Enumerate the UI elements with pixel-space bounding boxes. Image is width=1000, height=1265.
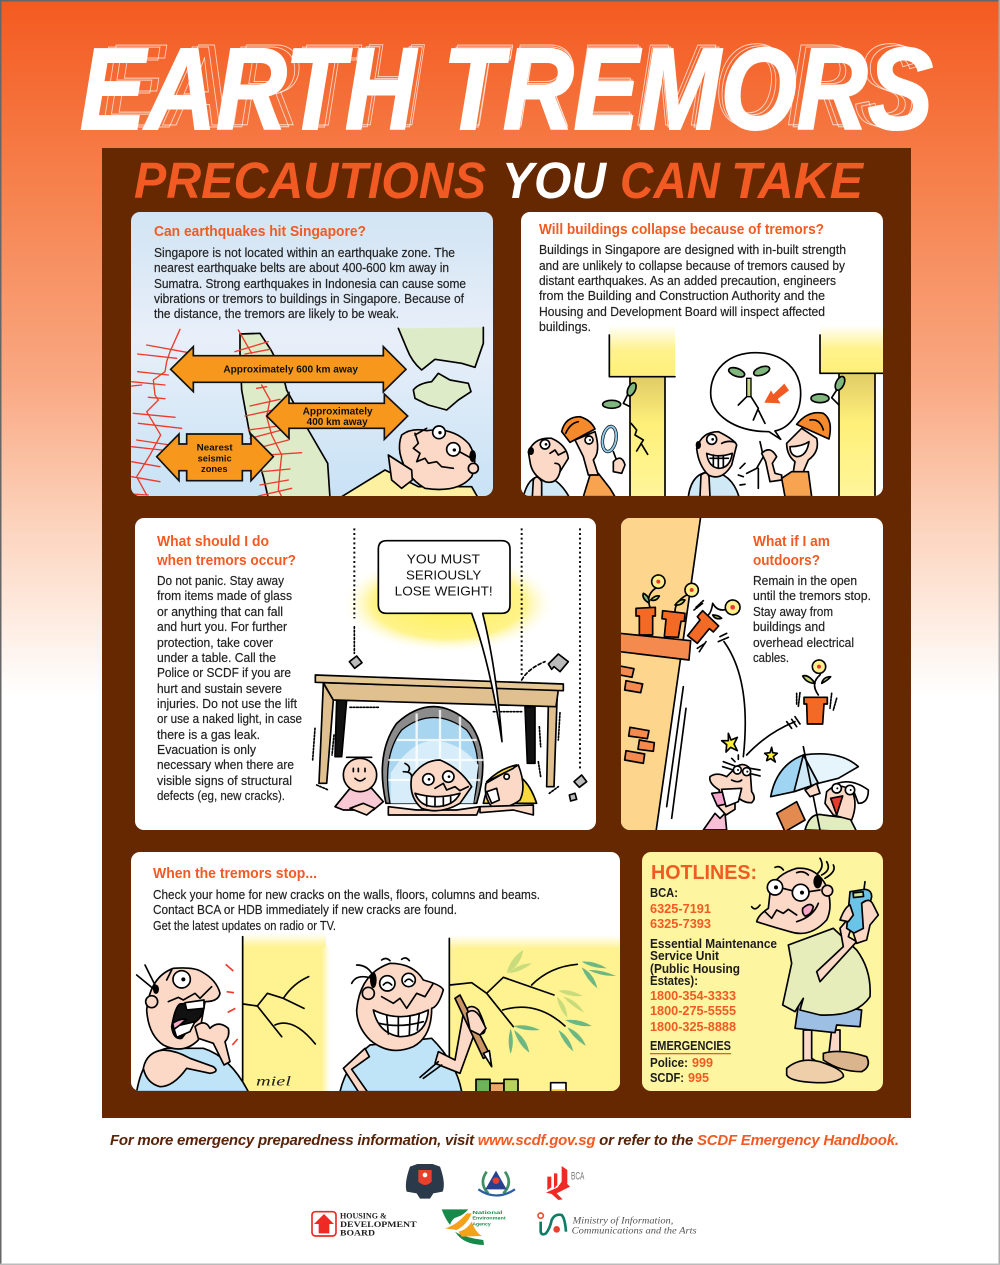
text block: remain in the open: cables. (753, 651, 789, 665)
text block: what to do: Police or SCDF if you are (157, 666, 291, 680)
heading: will buildings collapse: Will buildings collapse because of tremors? (539, 222, 824, 238)
text block: remain in the open: until the tremors stop. (753, 589, 871, 603)
hotline: essential maintenance service unit: Estates): (650, 974, 698, 988)
painted wall (449, 935, 620, 1092)
logo: Ministry of Information, Communications and the Arts: Ministry of Information, (572, 1215, 673, 1226)
wall with crack (243, 933, 330, 1092)
map: Malaysia landmass (398, 327, 483, 370)
arrow: approximately 400 km away (267, 393, 408, 439)
text block: what to do: there is a gas leak. (157, 728, 260, 742)
hotline: essential maintenance service unit: Service Unit (650, 949, 720, 963)
heading: what should I do: when tremors occur? (156, 553, 296, 569)
cartoon: man on mobile phone (752, 858, 878, 1083)
subtitle: Precautions you can take: CAN (620, 152, 721, 209)
heading: hotlines: HOTLINES: (651, 861, 757, 884)
text block: location explanation: the distance, the tremors are likely to be weak. (154, 307, 399, 321)
cartoon: man paints over cracks (137, 933, 620, 1093)
arrow: approximately 400 km away: Approximately (303, 406, 373, 417)
cartoon: child (335, 757, 383, 815)
speech bubble: you must seriously lose weight: LOSE WEIGHT! (395, 583, 493, 598)
panel: what should I do when tremors occur (135, 518, 596, 830)
text block: remain in the open: Remain in the open (753, 574, 857, 588)
speech bubble: you must seriously lose weight (378, 541, 510, 742)
logo: National Environment Agency: Environment (472, 1216, 506, 1222)
cartoon: man hit by pot (703, 755, 760, 830)
cartoon: laughing man (688, 432, 739, 497)
arrow: approximately 600 km away (171, 347, 406, 392)
bamboo leaves painted on the wall (507, 950, 616, 1054)
text block: building strength (539, 243, 846, 334)
heading: when the tremors stop: When the tremors stop... (153, 866, 317, 882)
bricks (620, 666, 654, 763)
text block: what to do: under a table. Call the (157, 651, 276, 665)
left column and beam (609, 325, 675, 497)
building wall (620, 517, 701, 832)
flight path to man's head (718, 633, 800, 757)
heading: what should I do: What should I do (157, 534, 269, 550)
text block: what to do: defects (eg, new cracks). (157, 789, 285, 803)
plant growing from column (603, 375, 847, 408)
text block: what to do: or anything that can fall (157, 605, 283, 619)
panel: will buildings collapse (521, 212, 883, 497)
text block: location explanation: nearest earthquake belts are about 400-600 km away in (154, 261, 449, 275)
brown main board (102, 148, 911, 1118)
subtitle: Precautions you can take: YOU (502, 152, 607, 209)
text block: remain in the open (753, 574, 871, 665)
logos row (312, 1164, 697, 1245)
logo: Housing and Development Board: BOARD (340, 1228, 375, 1237)
cartoon: worried man (523, 438, 569, 497)
logo: National Environment Agency: Agency (472, 1222, 491, 1228)
panel: when the tremors stop (131, 852, 620, 1093)
hotline: emergencies: 995 (688, 1071, 709, 1085)
sandals and legs (787, 998, 868, 1083)
text block: what to do: Evacuation is only (157, 743, 257, 757)
text block: check your home (153, 888, 540, 933)
logo: Housing and Development Board: DEVELOPMENT (340, 1220, 417, 1229)
arrow: approximately 600 km away: Approximately 600 km away (223, 364, 359, 375)
text block: check your home: Contact BCA or HDB immediately if new cracks are found. (153, 903, 457, 917)
text block: building strength: Buildings in Singapore are designed with in-built strength (539, 243, 846, 257)
cartoon: father grinning (388, 760, 480, 815)
falling debris trails (349, 528, 587, 801)
table (313, 675, 563, 793)
hotline: emergencies (650, 1039, 731, 1085)
text block: building strength: Housing and Development Board will inspect affected (539, 305, 825, 319)
cartoon: family under the table (313, 528, 587, 815)
hotline: BCA: BCA: (650, 886, 678, 900)
text block: remain in the open: Stay away from (753, 605, 833, 619)
speech bubble: you must seriously lose weight: SERIOUSLY (406, 567, 482, 582)
heading: what if I am outdoors: outdoors? (753, 553, 820, 569)
hotline: emergencies: Police: (650, 1056, 688, 1070)
star (722, 733, 737, 752)
hotline: emergencies: EMERGENCIES (650, 1039, 731, 1053)
map: Sumatra landmass (240, 333, 330, 498)
logo: BCA (546, 1166, 585, 1200)
text block: what to do: necessary when there are (157, 758, 294, 772)
hotline: BCA: 6325-7393 (650, 917, 711, 931)
flowerpot in mid air (797, 660, 837, 724)
heading: can earthquakes hit Singapore: Can earthquakes hit Singapore? (154, 224, 366, 240)
yellow glow (348, 568, 548, 650)
hotline: essential maintenance service unit: Essential Maintenance (650, 937, 777, 951)
speech bubble with seedling (711, 353, 801, 439)
panel: what if I am outdoors (620, 517, 883, 832)
logo: Housing and Development Board: HOUSING & (340, 1212, 387, 1221)
text block: what to do: visible signs of structural (157, 774, 292, 788)
cartoon: engineer with magnifier (562, 417, 625, 497)
cartoon: man looking at the map (342, 426, 478, 498)
heading: what should I do (156, 534, 296, 569)
text block: what to do: hurt and sustain severe (157, 682, 282, 696)
text block: location explanation: Singapore is not located within an earthquake zone. The (154, 246, 455, 260)
falling flowerpot (688, 600, 740, 652)
flowerpots on ledge (636, 575, 698, 637)
hotline: BCA: 6325-7191 (650, 902, 711, 916)
text block: location explanation: Sumatra. Strong earthquakes in Indonesia can cause some (154, 277, 466, 291)
arrow: approximately 400 km away: 400 km away (307, 417, 368, 428)
panel: can earthquakes hit Singapore (131, 212, 493, 498)
hotline: essential maintenance service unit: 1800-325-8888 (650, 1020, 736, 1034)
text block: building strength: and are unlikely to collapse because of tremors caused by (539, 259, 846, 273)
logo: BCA: BCA (571, 1170, 585, 1182)
text block: location explanation (154, 246, 466, 321)
hotline: essential maintenance service unit (650, 937, 777, 1034)
text block: what to do (157, 574, 302, 803)
logo: National Environment Agency (442, 1209, 506, 1245)
arrow: nearest seismic zones: Nearest (197, 442, 233, 452)
hotline: essential maintenance service unit: 1800-275-5555 (650, 1004, 736, 1018)
text block: what to do: and hurt you. For further (157, 620, 287, 634)
hotline: essential maintenance service unit: 1800-354-3333 (650, 989, 736, 1003)
cartoon: woman with umbrella (771, 747, 868, 832)
cartoon: engineer holding crack (738, 413, 830, 497)
subtitle: Precautions you can take: PRECAUTIONS (134, 152, 486, 209)
heading: what if I am outdoors: What if I am (753, 534, 830, 550)
panel: hotlines (642, 852, 883, 1091)
subtitle: Precautions you can take: TAKE (731, 152, 865, 209)
shirt (783, 928, 870, 1015)
star (765, 747, 777, 762)
text block: building strength: from the Building and Construction Authority and the (539, 289, 825, 303)
hotline: BCA (650, 886, 711, 931)
text block: building strength: distant earthquakes. As an added precaution, engineers (539, 274, 836, 288)
cartoon: falling flowerpots (620, 517, 868, 832)
text block: check your home: Get the latest updates on radio or TV. (153, 919, 336, 933)
speech bubble: you must seriously lose weight: YOU MUST (407, 551, 480, 566)
arrow: nearest seismic zones: zones (201, 464, 228, 474)
footer: more information line: For more emergency preparedness information, visit www.scdf.gov.sg or refer to the SCDF Emergency Handbook. (110, 1132, 899, 1149)
text block: what to do: or use a naked light, in case (157, 712, 302, 726)
logo: Ministry of Information, Communications and the Arts (538, 1213, 697, 1236)
map illustration (132, 327, 483, 498)
text block: remain in the open: buildings and (753, 620, 825, 634)
text block: location explanation: vibrations or tremors to buildings in Singapore. Because of (154, 292, 464, 306)
ledge (620, 633, 691, 660)
text block: what to do: from items made of glass (157, 589, 292, 603)
head (752, 858, 834, 933)
hotline: emergencies: SCDF: (650, 1071, 684, 1085)
arrow: nearest seismic zones: seismic (198, 453, 232, 463)
arrow: nearest seismic zones (157, 434, 273, 481)
map: island landmass (413, 373, 471, 410)
cartoon: smiling man painting (340, 958, 492, 1092)
text block: what to do: protection, take cover (157, 636, 273, 650)
text block: what to do: Do not panic. Stay away (157, 574, 285, 588)
right column and beam (820, 325, 883, 497)
map: seismic fault lines (132, 329, 302, 497)
logo: National Environment Agency: National (472, 1210, 503, 1216)
hotline: essential maintenance service unit: (Public Housing (650, 962, 740, 976)
logo: Ministry of Information, Communications and the Arts: Communications and the Arts (572, 1225, 697, 1236)
cartoon: shocked man (137, 964, 248, 1092)
heading: what if I am outdoors (753, 534, 830, 569)
text block: remain in the open: overhead electrical (753, 636, 854, 650)
wall with crack: miel (256, 1074, 291, 1089)
logo: Singapore coat of arms (406, 1164, 444, 1199)
arm and hand holding phone (817, 882, 878, 982)
text block: what to do: injuries. Do not use the lift (157, 697, 298, 711)
hotline: emergencies: 999 (692, 1056, 713, 1070)
logo: Housing and Development Board (312, 1212, 417, 1237)
porthole window behind the man (382, 707, 483, 803)
cartoon: mother (480, 765, 537, 815)
text block: check your home: Check your home for new cracks on the walls, floors, columns and beams. (153, 888, 540, 902)
text block: building strength: buildings. (539, 320, 591, 334)
cartoon: engineers inspect the cracks (523, 325, 883, 497)
logo: civil defence (478, 1171, 515, 1195)
paint pots (476, 1079, 566, 1093)
